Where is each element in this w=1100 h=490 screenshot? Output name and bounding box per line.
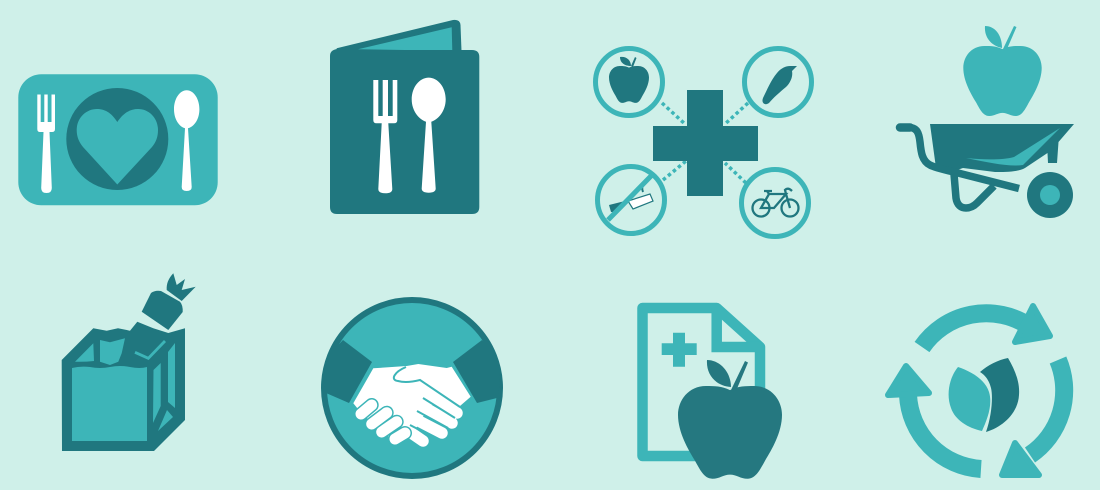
spoon <box>412 78 446 193</box>
light leaf <box>949 367 990 431</box>
document fold <box>717 308 760 347</box>
handle grip <box>900 123 910 132</box>
icon: apple on wheelbarrow <box>900 26 1074 218</box>
apple leaf and stem <box>707 360 748 391</box>
spoon <box>174 90 199 191</box>
icon: grocery bag with carrot <box>62 273 196 451</box>
circle: bicycle <box>742 170 808 236</box>
teal stripe <box>966 128 1060 166</box>
icon: recycling arrows with leaves <box>888 306 1064 475</box>
icon: handshake in circle <box>324 300 500 476</box>
finger separators <box>410 398 455 438</box>
circle: no smoking <box>598 166 664 234</box>
hands <box>353 364 471 442</box>
apple body <box>678 386 782 479</box>
thumb outline <box>394 367 460 407</box>
bag fold highlight <box>135 341 165 358</box>
dotted connectors <box>662 103 748 183</box>
wheel <box>1027 172 1073 218</box>
left cuff <box>324 340 372 403</box>
menu cover <box>330 49 479 214</box>
menu inner teal page <box>358 27 452 51</box>
icon: health cross with lifestyle circles <box>596 48 812 236</box>
left arrow <box>888 366 981 469</box>
top arrow <box>922 306 1050 347</box>
bag side panels <box>153 343 175 431</box>
leg <box>954 174 994 208</box>
circle: apple <box>596 48 662 116</box>
cross <box>653 90 758 196</box>
bag outer <box>62 322 185 451</box>
right hand fingers <box>407 389 457 441</box>
dark leaf <box>980 358 1019 432</box>
apple <box>963 26 1042 116</box>
fork <box>373 80 397 193</box>
fork <box>37 94 55 193</box>
carrot tops <box>167 273 196 301</box>
carrot <box>142 291 183 330</box>
handle and strut <box>905 128 1019 188</box>
plus sign <box>662 333 697 367</box>
tub <box>930 124 1074 173</box>
circle: pepper <box>744 48 812 116</box>
circle <box>324 300 500 476</box>
right cuff <box>453 340 500 403</box>
document <box>642 308 760 456</box>
icon: plate with heart on tray <box>18 74 218 205</box>
heart <box>77 109 158 184</box>
tray <box>18 74 218 205</box>
menu inside page <box>336 20 462 56</box>
icon: menu with cutlery <box>330 20 479 214</box>
bag front <box>72 366 147 441</box>
right arrow <box>1002 360 1064 475</box>
left fingers <box>361 405 405 439</box>
hub <box>1040 185 1060 205</box>
icon: medical document with apple <box>642 308 782 479</box>
plate <box>66 88 168 190</box>
bag inner back panels <box>75 338 125 365</box>
